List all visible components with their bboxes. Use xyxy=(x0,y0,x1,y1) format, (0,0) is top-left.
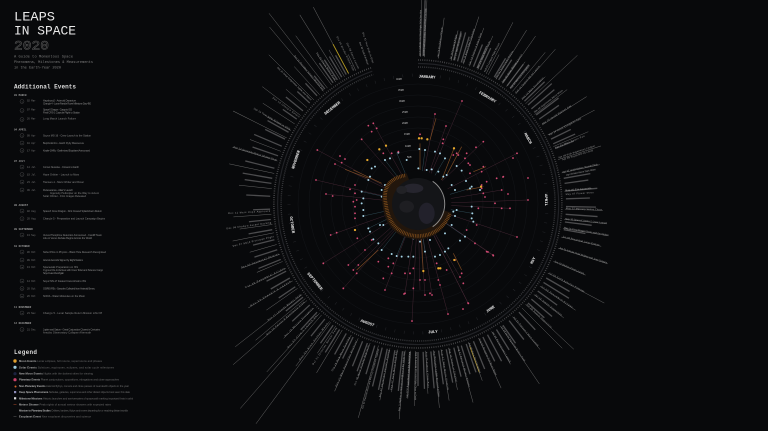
panel: legend: Non-Planetary Events Asteroid flybys, comets and close passes of near-Earth objects in the year xyxy=(19,384,129,388)
panel: legend: Exoplanet Event New exoplanet discoveries and science xyxy=(19,415,92,419)
radial event labels: Jun 21 Annular Solar Eclipse and June Solstice xyxy=(559,247,608,265)
August events: 02 Aug xyxy=(27,210,36,213)
March events: 07 Mar xyxy=(27,108,36,111)
radial event labels: Feb 09 Solar Orbiter Launch xyxy=(501,53,524,83)
heading: additional events: Additional Events xyxy=(14,84,76,90)
legend icon: non-planetary events xyxy=(14,386,16,388)
October events: Nobel Prize in Physics - Black Hole Research Recognised xyxy=(43,251,107,254)
July events: Comet Neowise - Closest to Earth xyxy=(43,166,80,169)
distance scale labels: 350M xyxy=(398,89,404,92)
radial event labels: Jul 23 Tianwen-1 Mars Launch xyxy=(512,316,540,348)
month: September: SEPTEMBER xyxy=(306,272,323,292)
radial event labels: Feb 02 Longest Flight Record xyxy=(483,42,501,73)
radial event labels: May 05 Eta Aquariids xyxy=(565,187,592,192)
July events: 2 xyxy=(21,173,23,176)
radial event labels: Dec 26 Annular Eclipse Path xyxy=(336,36,355,72)
radial event labels: Feb 18 Mars Occultation xyxy=(521,76,545,100)
radial event labels: Apr 08 Pink Supermoon Largest xyxy=(558,145,596,159)
March events: 1 xyxy=(21,100,23,103)
August events: SpaceX Crew Dragon - First Crewed Splashdown Return xyxy=(43,210,103,213)
radial event labels: Nov 17 Leonids Meteor Peak xyxy=(267,293,303,322)
distance scale labels: 100M xyxy=(405,145,411,148)
radial event labels: Nov 15 Falcon 9 Resilience Crew xyxy=(266,301,306,336)
December events xyxy=(14,322,101,334)
August events: 08 AUGUST xyxy=(14,204,28,207)
year ring of days xyxy=(274,60,562,348)
April events: 3 xyxy=(21,149,23,152)
December events: 21 Dec xyxy=(27,328,36,331)
September events xyxy=(14,228,102,240)
October events: 6 xyxy=(21,295,23,298)
radial event labels: May 22 Mercury Venus Close xyxy=(566,207,603,211)
panel: legend: Solar Events Solstices, equinoxes, eclipses, and solar cycle milestones xyxy=(19,365,115,369)
radial event labels: Dec 07 SN10 Prototype Flight xyxy=(232,235,274,248)
October events: 3 xyxy=(21,266,23,269)
radial event labels: Oct 13 Mars Opposition Brightest xyxy=(335,340,358,387)
July events: 4 xyxy=(21,189,23,192)
March events: 3 xyxy=(21,118,23,121)
October events xyxy=(14,245,107,298)
radial event labels: Sep 22 September Equinox Passing xyxy=(378,349,391,398)
March events: Chang'e 4 - Lunar Farside Rover Milestone Day 450 xyxy=(43,103,92,106)
radial event labels: Jan 13 Saturn Solar Conjunction xyxy=(462,28,476,64)
March events: 03 MARCH xyxy=(14,94,27,97)
radial event labels: Sep 17 New Moon Dark Sky xyxy=(390,349,399,390)
radial event labels: Dec 11 Mars Hope Approach xyxy=(228,210,271,215)
radial event labels: Mar 20 Vernal Equinox Day xyxy=(542,104,573,125)
October events: Spacewalk Preparation on ISS xyxy=(43,266,78,269)
cover for inner ray ends xyxy=(385,171,451,237)
radial event labels: Jul 05 Penumbral Eclipse xyxy=(540,285,574,309)
July events: 19 Jul xyxy=(27,173,36,176)
radial event labels: Jul 20 Saturn Opposition xyxy=(526,303,553,329)
radial event labels: Nov 23 Chang'e 5 Launch xyxy=(250,281,292,307)
panel: additional events list xyxy=(14,94,107,334)
October events: 5 xyxy=(21,287,23,290)
distance scale labels: 300M xyxy=(399,100,405,103)
radial event labels: Nov 10 Mercury Elongation xyxy=(284,307,315,338)
October events: SOFIA - Water Molecules on the Moon xyxy=(43,295,86,298)
radial event labels: Oct 16 New Moon Evening xyxy=(331,336,351,372)
panel: legend: Milestone Missions Historic launches and anniversaries of spacecraft marking important firsts in orbit xyxy=(19,396,133,400)
title: LEAPS xyxy=(14,10,55,24)
April events: Kepler-1649c - Earth-sized Exoplanet Announced xyxy=(43,149,91,152)
radial chart xyxy=(226,0,609,424)
July events: Solar Orbiter - First Images Released xyxy=(43,195,87,198)
legend icon: deep space phenomena xyxy=(14,391,16,393)
month: July: JULY xyxy=(428,331,439,335)
month: January: JANUARY xyxy=(419,76,436,80)
month: March: MARCH xyxy=(522,133,532,146)
July events: Ingenuity Helicopter on the Way to Jezero xyxy=(50,192,100,195)
orbit grid circles xyxy=(289,75,547,333)
radial event labels: Mar 09 Supermoon Worm Moon xyxy=(533,89,564,114)
legend icon: meteor shower xyxy=(14,403,16,406)
radial event labels: Dec 31 Year Ends in Orbit xyxy=(361,32,374,64)
April events: 10 Apr xyxy=(27,142,36,145)
subtitle xyxy=(14,54,93,70)
blue event dots xyxy=(362,149,480,257)
title xyxy=(14,10,76,54)
panel: legend: Planetary Events Planet conjunctions, oppositions, elongations and close approaches xyxy=(19,378,120,382)
legend text: missions to planetary bodies: Mission to Planetary Bodies Orbiters, landers, flybys and rovers departing for or reaching distant worlds xyxy=(19,409,129,413)
radial event labels: Apr 09 Soyuz MS-16 Liftoff xyxy=(562,149,594,161)
radial event labels: Aug 17 New Moon Viewing xyxy=(440,350,449,391)
subtitle: Phenomena, Milestones & Measurements xyxy=(14,60,93,65)
month labels xyxy=(288,76,547,335)
legend icon: exoplanet event xyxy=(14,416,16,418)
March events: 02 Mar xyxy=(27,99,36,102)
radial event labels: Nov 03 Crew-1 Launch Set xyxy=(287,314,319,349)
inner event rays and dots xyxy=(316,101,528,321)
December events: Jupiter and Saturn - Great Conjunction Closest in Centuries xyxy=(43,328,101,331)
September events: 09 SEPTEMBER xyxy=(14,228,33,231)
month: November: NOVEMBER xyxy=(292,150,302,170)
October events: 06 Oct xyxy=(27,251,36,254)
distance scale labels: 200M xyxy=(402,122,408,125)
radial event labels: Jul 14 Jupiter Opposition xyxy=(534,294,563,317)
December events: Arecibo Observatory Collapse Aftermath xyxy=(43,331,92,334)
month: August: AUGUST xyxy=(360,320,375,329)
radial event labels: Jul 04 Earth Aphelion Passage xyxy=(548,272,586,293)
August events: 2 xyxy=(21,218,23,220)
radial event labels: Sep 01 Asteroid 2011 ES4 Flyby Close to Earth xyxy=(414,352,417,401)
month: May: MAY xyxy=(531,256,538,265)
September events: 1 xyxy=(21,234,23,237)
radial event labels: Dec 13 Geminids Meteor Shower Peak xyxy=(233,146,278,162)
October events: 2 xyxy=(21,259,23,262)
April events: 2 xyxy=(21,142,23,145)
heading: legend: Legend xyxy=(14,349,37,356)
subtitle: in the Earth-Year 2020 xyxy=(14,66,61,70)
April events: 1 xyxy=(21,134,23,137)
July events: Hope Orbiter - Launch to Mars xyxy=(43,173,80,176)
panel: legend xyxy=(13,359,133,419)
radial event labels: Jan 05 Perihelion of Earth xyxy=(437,27,444,58)
radial event labels: Mar 24 Venus Elongation East xyxy=(548,117,582,137)
March events: Hayabusa2 - Asteroid Departure xyxy=(43,99,77,102)
March events: 2 xyxy=(21,109,23,112)
radial event labels: Dec 24 Ursids Meteor Peak xyxy=(315,52,337,82)
title: IN SPACE xyxy=(14,24,76,38)
legend icon: sky events xyxy=(13,372,17,375)
August events: 20 Aug xyxy=(27,218,36,220)
October events: 20 Oct xyxy=(27,287,36,290)
radial event labels: Nov 30 Penumbral Eclipse xyxy=(245,267,286,289)
October events: 4 xyxy=(21,280,23,283)
March events: Long March Launch Failure xyxy=(43,117,77,120)
distance scale labels: 400M xyxy=(396,78,402,81)
panel: legend: New Moon Events Nights with the darkest skies for viewing xyxy=(19,372,94,376)
radial event labels: May 31 Crew Dragon Docks with the Station xyxy=(564,226,609,237)
orange halo xyxy=(382,173,452,239)
legend icon: moon events xyxy=(13,359,17,363)
legend icon: milestone missions xyxy=(14,397,16,399)
panel: legend: Meteor Shower Peak nights of annual meteor showers with expected rates xyxy=(19,402,112,406)
July events xyxy=(14,160,100,198)
radial event labels: Dec 05 Hayabusa2 Returns xyxy=(241,252,280,269)
August events: 1 xyxy=(21,210,23,213)
month: June: JUNE xyxy=(486,305,497,314)
April events: BepiColombo - Earth Flyby Manoeuvre xyxy=(43,142,85,145)
radial event labels: May 30 SpaceX Demo-2 Crew Launch xyxy=(565,217,608,225)
October events: 14 Oct xyxy=(27,280,36,283)
month: October: OCTOBER xyxy=(288,216,294,234)
radial event labels: Aug 13 Venus at Greatest xyxy=(448,348,458,383)
March events xyxy=(14,94,92,122)
yellow event dots xyxy=(355,138,481,271)
distance scale labels: 250M xyxy=(402,111,408,114)
radial event labels: Jun 05 Penumbral Lunar Eclipse xyxy=(562,235,600,247)
radial event labels: Jan 19 Falcon 9 Abort Test xyxy=(468,32,483,66)
radial event labels: Jan 10 Wolf Moon Rises xyxy=(454,33,463,61)
radial event labels: Sep 11 Neptune at Opposition Brightest of the Whole Year xyxy=(398,351,406,411)
dense label bundles xyxy=(243,0,598,391)
October events: Soyuz MS-17 Fastest Crew Arrival to ISS xyxy=(43,280,86,283)
radial event labels: Feb 06 Christina Koch Returns xyxy=(495,50,515,79)
October events: OSIRIS-REx - Samples Collected from Asteroid Bennu xyxy=(43,287,96,290)
radial event labels: Jun 23 Beidou Final Launch xyxy=(554,261,585,276)
December events: 1 xyxy=(21,328,23,331)
radial event labels: Jan 01 Perihelion Countdown Begins for the New Year xyxy=(419,10,422,56)
month: April: APRIL xyxy=(543,194,547,207)
radial event labels: Jan 03 Quadrantids Meteor Shower Peak in the North xyxy=(422,7,428,56)
orange halo speckle xyxy=(385,175,450,236)
radial event labels: Jul 30 Perseverance Launch xyxy=(491,331,512,364)
October events: 09 Oct xyxy=(27,259,36,262)
July events: 1 xyxy=(21,166,23,169)
March events: Final CRS-1 Capsule Flight to Station xyxy=(43,112,81,115)
earth globe xyxy=(392,178,445,230)
September events: Life on Venus Debate Begins Across the World xyxy=(43,237,93,240)
radial event labels: Dec 16 Chang'e Return xyxy=(272,97,301,119)
November events xyxy=(14,306,102,315)
title: 2020 xyxy=(14,38,49,54)
October events: 1 xyxy=(21,251,23,254)
April events xyxy=(14,128,92,152)
radial event labels: Oct 01 Harvest Moon and Mercury Elongation Together xyxy=(361,348,380,409)
radial event labels: Jul 28 Delta Aquariids Meteor Peak xyxy=(500,326,526,363)
March events: SpaceX Dragon - Cargo to ISS xyxy=(43,108,72,111)
distance scale labels xyxy=(396,78,412,159)
radial event labels: Feb 15 Cygnus NG-13 Launch xyxy=(516,65,541,94)
July events: 23 Jul xyxy=(27,181,36,184)
radial event labels: Oct 06 Mars Closest Approach xyxy=(354,344,370,386)
radial event labels: Oct 21 Orionids Meteor Peak xyxy=(312,326,339,366)
October events: Artemis Accords Signed by Eight Nations xyxy=(43,259,84,262)
October events: 10 OCTOBER xyxy=(14,245,30,248)
October events: Cygnus NG-14 Arrives with Crew Toilet and Science Cargo xyxy=(43,269,104,272)
radial event labels: Sep 02 Full Corn Moon over the Hemisphere xyxy=(406,351,411,398)
October events: 26 Oct xyxy=(27,295,36,298)
October events: Soyuz Launched Again xyxy=(43,272,65,275)
July events: Perseverance - Atlas V Launch xyxy=(43,189,74,192)
radial event labels: May 07 Flower Moon xyxy=(566,191,594,196)
radial event labels: Jan 10 Penumbral Eclipse xyxy=(449,33,458,60)
distance scale labels: 50M xyxy=(407,156,412,159)
September events: Venus Phosphine Detection Announced - Cardiff Team xyxy=(43,234,102,237)
radial event labels xyxy=(226,7,609,411)
radial event labels: Aug 03 Sturgeon Full Moon Night xyxy=(478,338,497,376)
radial event labels: Aug 20 Chang'e Update Received at Base xyxy=(432,351,440,398)
subtitle: A Guide to Momentous Space xyxy=(14,54,73,60)
November events: 11 NOVEMBER xyxy=(14,306,32,309)
event rays xyxy=(316,101,528,321)
August events: Chang'e 5 - Preparation and Launch Campaign Begins xyxy=(43,218,106,220)
radial event labels: Jan 24 New Moon Night xyxy=(476,40,491,69)
March events: 26 Mar xyxy=(27,117,36,120)
July events: Tianwen-1 - Mars Orbiter and Rover xyxy=(43,181,84,184)
radial event labels: Apr 23 New Moon Dark Skies xyxy=(566,168,597,177)
November events: 1 xyxy=(21,312,23,315)
radial event labels: Dec 14 Total Solar Eclipse in Chile xyxy=(253,107,291,131)
radial event labels: Apr 22 Lyrids Meteor Shower Peak xyxy=(562,163,599,174)
radial event labels: Dec 21 December Solstice Shortest Day xyxy=(293,55,325,92)
radial event labels: Feb 10 Mercury Elongation xyxy=(510,64,531,90)
radial event labels: Dec 30 Cold Full Moon xyxy=(358,42,369,66)
radial event labels: Dec 08 Chang'e Ascent Docking xyxy=(226,221,272,230)
legend icon: planetary events xyxy=(13,378,17,381)
radial event labels: Oct 31 Blue Hunter Moon xyxy=(298,322,329,361)
distance scale labels: 150M xyxy=(404,133,410,136)
radial leader lines xyxy=(229,0,608,424)
April events: 17 Apr xyxy=(27,149,36,152)
month: December: DECEMBER xyxy=(324,101,342,116)
December events: 12 DECEMBER xyxy=(14,322,32,325)
radial event labels: Aug 12 Perseids Meteor Shower xyxy=(457,346,471,388)
panel: legend: Moon Events Lunar eclipses, full moons, supermoons and phases xyxy=(19,359,103,363)
July events: 14 Jul xyxy=(27,166,36,169)
panel: legend: Deep Space Phenomena Nebulae, galaxies, supernova and other distant objects best seen this date xyxy=(19,390,130,394)
month: February: FEBRUARY xyxy=(478,91,497,105)
April events: 04 APRIL xyxy=(14,128,27,132)
August events xyxy=(14,204,106,221)
October events: 13 Oct xyxy=(27,266,36,269)
legend icon: solar events xyxy=(13,366,17,369)
April events: Soyuz MS-16 - Crew Launch to the Station xyxy=(43,134,92,137)
radial event labels: Apr 01 Mars Saturn Pair xyxy=(554,135,585,149)
September events: 13 Sep xyxy=(27,234,36,237)
July events: 07 JULY xyxy=(14,160,25,163)
radial event labels: Dec 28 Soyuz Launch xyxy=(346,43,359,70)
April events: 09 Apr xyxy=(27,134,36,137)
July events: 3 xyxy=(21,181,23,184)
November events: 23 Nov xyxy=(27,312,36,315)
radial event labels: Aug 25 Asteroid Close Pass xyxy=(425,352,430,389)
July events: 30 Jul xyxy=(27,189,36,192)
radial event labels: Aug 08 Venus West Elongation xyxy=(468,342,482,374)
pink event dots xyxy=(316,101,528,321)
November events: Chang'e 5 - Lunar Sample Return Mission Lifts Off xyxy=(43,312,102,315)
radial event labels: Dec 21 Great Conjunction Jupiter and Saturn xyxy=(276,66,313,102)
